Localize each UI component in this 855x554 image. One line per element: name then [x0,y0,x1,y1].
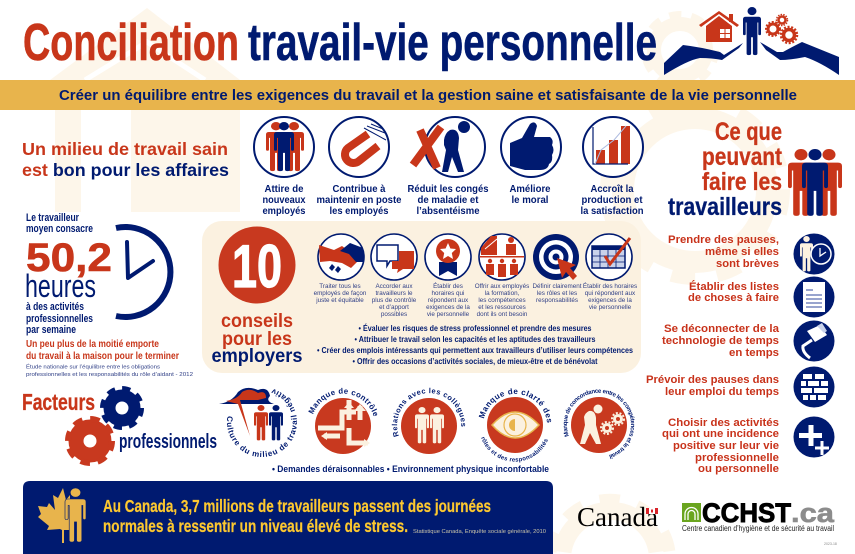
worker tips text: même si elles [705,246,779,258]
statistic: 50,2 hours [25,212,112,336]
tip captions: répondent aux [428,297,469,304]
red note: work brought home: du travail à la maison pour le terminer [26,351,179,362]
heading: professional factors [22,389,217,453]
banner text: Statistique Canada, Enquête sociale générale, 2010 [413,529,546,535]
benefit labels: employés [262,205,306,217]
heading: what workers can do: faire les [702,168,782,196]
source note: professionnelles et les responsabilités du rôle d’aidant - 2012 [26,372,193,378]
icon: magnet [329,117,389,177]
panel: 10 tips for employers [202,221,641,373]
tip captions: et d’apport [379,304,409,311]
benefit labels: Accroît la [590,183,634,195]
worker tips text: positive sur leur vie [673,440,779,452]
tip captions: dont ils ont besoin [477,311,528,318]
banner: 3.7 million workers [23,481,553,554]
icon: target and cursor [533,234,579,280]
worker tips text: en temps [729,347,779,359]
factors bullets: • Demandes déraisonnables • Environnement physique inconfortable [272,464,549,475]
statistic: 50,2 hours: moyen consacre [26,223,93,235]
benefit labels [262,183,644,217]
badge: number 10: 10 [232,233,282,300]
factor: lack of control [308,388,378,454]
benefit labels: de maladie et [418,194,479,206]
logo: CCHST.ca: CCHST [702,498,791,528]
factor: skills mismatch: Manque de concordance entre les compétences et le travail [564,390,635,460]
source note: Étude nationale sur l’équilibre entre les obligations [26,364,160,370]
tip captions: plus de contrôle [372,297,417,304]
statistic: 50,2 hours: à des activités [26,301,84,313]
icon: thumbs up [501,117,561,177]
tip captions: possibles [381,311,407,318]
benefit labels: nouveaux [262,194,306,206]
icon: stooped person and red cross [413,117,485,177]
tip captions: les compétences [478,297,526,304]
icon: attracts new employees [254,117,314,177]
benefit labels: les employés [330,205,389,217]
tip captions: juste et équitable [315,297,364,304]
benefit labels: le moral [512,194,549,206]
benefit labels: production et [582,194,643,206]
tip captions: travailleurs le [375,290,413,297]
worker tips text: leur emploi du temps [665,386,779,398]
banner text: normales à ressentir un niveau élevé de stress. [103,516,408,536]
tip bullets: • Attribuer le travail selon les capacités et les aptitudes des travailleurs [354,334,596,344]
tip captions: Définir clairement [532,283,582,290]
heading: what workers can do: travailleurs [668,193,782,221]
icon: maple leaf and person [38,488,86,543]
tip captions: employés de façon [314,290,367,297]
icon: speech bubbles [371,234,417,280]
banner text [103,496,546,536]
logo: CCHST.ca: .ca [791,498,835,528]
heading: tips for employers: employers [212,345,303,367]
tip bullets: • Offrir des occasions d’activités sociales, de mieux-être et de bénévolat [352,356,598,366]
benefit labels: Améliore [510,183,551,195]
red note: work brought home: Un peu plus de la moitié emporte [26,339,159,350]
icon: calendar checkmark [586,234,632,280]
source note [26,364,193,378]
heading: professional factors: Facteurs [22,389,95,415]
benefit labels: maintenir en poste [316,194,402,206]
heading: what workers can do [668,118,783,221]
worker tips text: qui ont une incidence [662,428,779,440]
factor: colleague relations: Relations avec les collègues [392,388,466,437]
banner text: Au Canada, 3,7 millions de travailleurs passent des journées [103,496,491,516]
title: Conciliation [23,14,239,72]
heading: healthy workplace: est bon pour les affaires [22,160,229,180]
heading: healthy workplace: Un milieu de travail sain [22,139,228,159]
tip captions: et les ressources [478,304,526,311]
heading: what workers can do: Ce que [715,118,782,146]
heading: tips for employers: conseils [221,310,293,332]
tip captions: vie personnelle [589,304,632,311]
worker tips text: Se déconnecter de la [664,323,780,335]
worker tips text: ou personnelle [698,463,779,475]
icon: training class [479,234,525,280]
logo: CCHST.ca [682,498,835,533]
heading: what workers can do: peuvant [702,143,783,171]
factor: negative work culture [219,388,297,457]
statistic: 50,2 hours: par semaine [26,324,76,336]
tip captions [314,281,637,318]
subtitle band: Créer un équilibre entre les exigences du travail et la gestion saine et satisfaisante de la vie personnelle [59,88,797,104]
tip captions: horaires qui [432,290,464,297]
worker tips text: Prendre des pauses, [668,234,779,246]
heading: tips for employers [212,310,303,367]
tip captions: exigences de la [588,297,632,304]
icon: plus signs [794,416,834,458]
statistic: 50,2 hours: 50,2 [26,236,112,280]
title [23,14,657,72]
tip bullets [317,323,633,366]
statistic: 50,2 hours: Le travailleur [26,212,80,224]
tip captions: Accorder aux [375,283,413,290]
worker tips text: Choisir des activités [668,417,779,429]
icon: to-do list [794,276,834,318]
worker tips text: sont brèves [716,258,779,270]
heading: tips for employers: pour les [222,328,292,350]
worker tips text: professionnelle [695,452,779,464]
tip captions: Offrir aux employés [475,283,529,290]
icon: red gear [68,419,112,463]
tip captions: Établir des [433,281,463,290]
tip bullets: • Créer des emplois intéressants qui permettent aux travailleurs d’utiliser leurs compétences [317,345,633,355]
tip captions: les rôles et les [537,290,577,297]
worker tips text: Prévoir des pauses dans [646,374,779,386]
tip captions: Traiter tous les [319,283,361,290]
icon: three workers [788,149,842,216]
factor: lack of role clarity [478,388,552,463]
statistic: 50,2 hours: heures [25,268,96,304]
factor: lack of control: Manque de contrôle [308,388,378,416]
factor: lack of role clarity: rôles et des responsabilités [481,436,548,463]
icon: clock [116,227,170,317]
tip captions: responsabilités [536,297,578,304]
factor: negative work culture: Culture du milieu de travail négative [226,389,297,457]
logo: Canada wordmark: Canada [577,502,658,532]
tip bullets: • Évaluer les risques de stress professionnel et prendre des mesures [358,323,592,333]
icon: handshake [318,234,364,280]
icon: unplugged device [794,320,834,362]
heading: professional factors: professionnels [119,431,217,453]
tip captions: exigences de la [426,304,470,311]
icon: navy gear [103,389,141,427]
title: travail-vie personnelle [248,14,657,72]
benefit labels: Contribue à [332,183,386,195]
factor: lack of role clarity: Manque de clarté des [478,388,552,423]
worker tips text: de choses à faire [688,292,779,304]
worker tips text: Établir des listes [689,280,779,293]
red note: work brought home [26,339,179,362]
icon: growth bar chart [583,117,643,177]
subtitle band [0,80,855,110]
icon: star ribbon [425,234,471,280]
icon: hands holding house, person and gears [664,7,839,75]
tip captions: qui répondent aux [585,290,636,297]
icon: person with clock [794,234,834,274]
badge: number 10 [218,226,296,304]
benefit labels: Attire de [264,183,304,195]
tip captions: Établir des horaires [583,281,637,290]
benefit labels: Réduit les congés [408,183,489,195]
tip captions: la formation, [485,290,520,297]
worker tips text [646,234,780,475]
document code: 2023-18 [824,542,837,546]
tip captions: vie personnelle [427,311,470,318]
benefit labels: l’absentéisme [416,205,480,217]
statistic: 50,2 hours: professionnelles [26,313,93,325]
benefit labels: la satisfaction [580,205,644,217]
heading: healthy workplace [22,139,229,180]
icon: brick wall [794,366,834,408]
worker tips text: technologie de temps [662,335,779,347]
